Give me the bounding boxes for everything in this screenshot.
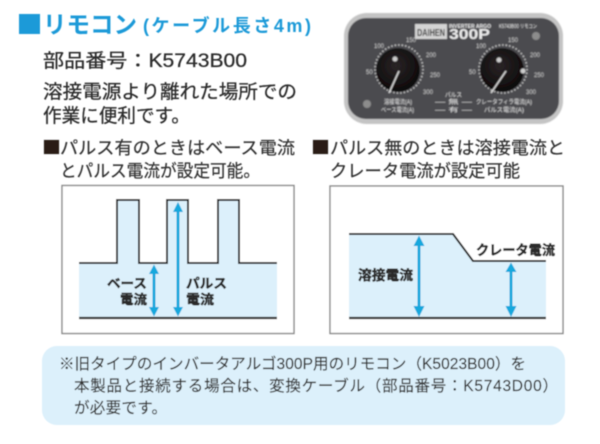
arrow: crater current [506, 262, 516, 317]
label: pulse current: パルス [186, 276, 227, 291]
remote control device [344, 13, 563, 124]
heading: pulse on [44, 138, 295, 181]
model name: K5743B00 リモコン [499, 24, 537, 30]
dial legends: — 有 — [435, 106, 472, 114]
heading: pulse off: パルス無のときは溶接電流と [330, 138, 565, 158]
label: base current: 電流 [120, 292, 147, 307]
dial legends: クレータフィラ電流(A) [476, 98, 532, 106]
left dial: 250 [430, 73, 441, 79]
heading: pulse off: クレータ電流が設定可能 [330, 161, 520, 181]
right dial: 100 [476, 44, 487, 50]
dial legends: ベース電流(A) [381, 106, 414, 114]
label: pulse current: 電流 [186, 292, 214, 307]
left dial: 200 [426, 53, 437, 59]
right dial: 150 [508, 38, 519, 44]
right dial: 50 [469, 70, 476, 76]
model name [449, 24, 537, 43]
description text [43, 81, 297, 127]
arrow: base current [149, 264, 159, 316]
dial legends: パルス [445, 92, 462, 99]
label: welding current: 溶接電流 [358, 267, 414, 283]
arrow: pulse current [173, 202, 183, 316]
label: base current: ベース [107, 276, 147, 291]
dial legends: 溶接電流(A) [384, 98, 412, 106]
screws [532, 32, 540, 40]
brand logo [415, 24, 447, 39]
title [19, 12, 311, 39]
note panel: 本製品と接続する場合は、変換ケーブル（部品番号：K5743D00） [74, 376, 558, 395]
right dial: 300 [526, 90, 537, 96]
title: (ケーブル長さ4m) [143, 15, 311, 36]
description text: 作業に便利です。 [43, 105, 190, 127]
part number: 部品番号：K5743B00 [43, 50, 247, 72]
right dial: 250 [534, 73, 545, 79]
heading: pulse on: とパルス電流が設定可能。 [60, 161, 260, 181]
arrow: welding current [414, 236, 424, 317]
left dial: 100 [374, 44, 385, 50]
left dial [366, 38, 441, 96]
description text: 溶接電源より離れた場所での [43, 81, 297, 103]
dial legends [381, 92, 532, 114]
model name: INVERTER ARGO [449, 24, 491, 30]
dial legends: パルス電流(A) [484, 106, 524, 114]
chart: pulse off waveform [330, 186, 563, 334]
title: リモコン [43, 12, 137, 39]
dial legends: — 無 — [435, 98, 472, 106]
label: pulse current [186, 276, 227, 307]
label: crater current: クレータ電流 [476, 243, 555, 258]
label: base current [107, 276, 147, 307]
left dial: 150 [406, 38, 417, 44]
chart: pulse on waveform [62, 186, 294, 334]
model name: 300P [449, 26, 490, 43]
right dial [469, 38, 545, 96]
note panel: ※旧タイプのインバータアルゴ300P用のリモコン（K5023B00）を [59, 354, 526, 373]
heading: pulse off [313, 138, 565, 181]
heading: pulse on: パルス有のときはベース電流 [60, 138, 295, 158]
left dial: 300 [423, 90, 434, 96]
note panel [42, 346, 565, 425]
right dial: 200 [530, 53, 541, 59]
brand logo: DAIHEN [417, 28, 445, 39]
note panel: が必要です。 [74, 399, 167, 417]
left dial: 50 [366, 70, 373, 76]
